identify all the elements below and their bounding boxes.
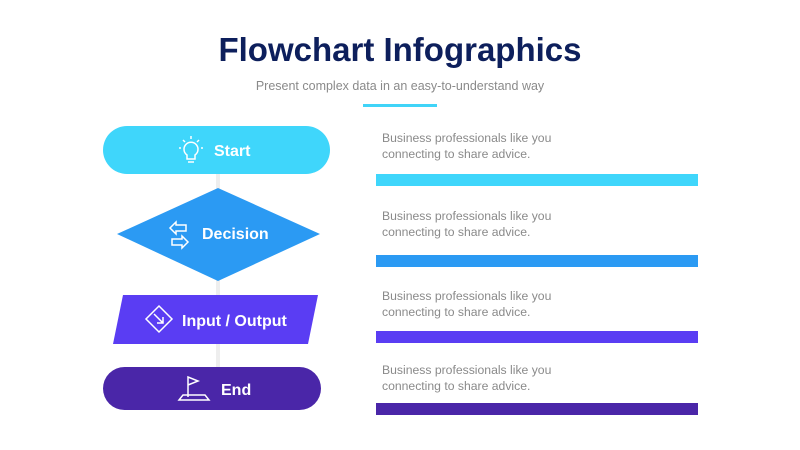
- title underline: [363, 104, 437, 107]
- connector line: [216, 174, 220, 410]
- shape: start: Start: [214, 143, 251, 160]
- text block 4: [382, 363, 551, 393]
- icon: arrows: [170, 222, 188, 248]
- text block 3: connecting to share advice.: [382, 305, 530, 319]
- icon: flag: [179, 377, 209, 400]
- icon: diamond arrow: [146, 306, 172, 332]
- title: Flowchart Infographics: [218, 31, 582, 68]
- shape: decision: Decision: [202, 226, 269, 243]
- text block 4: Business professionals like you: [382, 363, 551, 377]
- text block 1: Business professionals like you: [382, 131, 551, 145]
- bar 2: [376, 255, 698, 267]
- bar 4: [376, 403, 698, 415]
- text block 2: connecting to share advice.: [382, 225, 530, 239]
- bar 3: [376, 331, 698, 343]
- subtitle: Present complex data in an easy-to-understand way: [256, 79, 544, 93]
- icon: bulb: [179, 136, 203, 162]
- text block 1: connecting to share advice.: [382, 147, 530, 161]
- text block 2: [382, 209, 551, 239]
- shape: input/output: Input / Output: [182, 313, 288, 330]
- shape: end: [103, 367, 321, 410]
- shape: decision: [117, 188, 320, 281]
- text block 4: connecting to share advice.: [382, 379, 530, 393]
- text block 1: [382, 131, 551, 161]
- shape: start: [103, 126, 330, 174]
- bar 1: [376, 174, 698, 186]
- text block 3: [382, 289, 551, 319]
- text block 3: Business professionals like you: [382, 289, 551, 303]
- shape: input/output: [113, 295, 318, 344]
- shape: end: End: [221, 382, 251, 399]
- text block 2: Business professionals like you: [382, 209, 551, 223]
